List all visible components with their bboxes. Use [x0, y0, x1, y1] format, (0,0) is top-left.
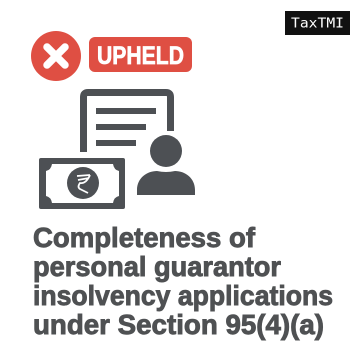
title: [33, 222, 333, 340]
logo: TaxTMI: TaxTMI: [291, 16, 344, 32]
title: Completeness of: [33, 222, 256, 253]
title: personal guarantor: [33, 251, 281, 282]
icon: person: [137, 135, 195, 195]
title: insolvency applications: [33, 280, 333, 311]
icon: document with text lines: [84, 92, 170, 152]
title: under Section 95(4)(a): [33, 309, 324, 340]
badge: UPHELD: UPHELD: [97, 42, 184, 70]
icon: banknote with rupee: [39, 158, 125, 209]
logo: TaxTMI: [285, 11, 350, 35]
icon: red circle with X: [31, 31, 81, 81]
badge: UPHELD: [89, 37, 192, 72]
